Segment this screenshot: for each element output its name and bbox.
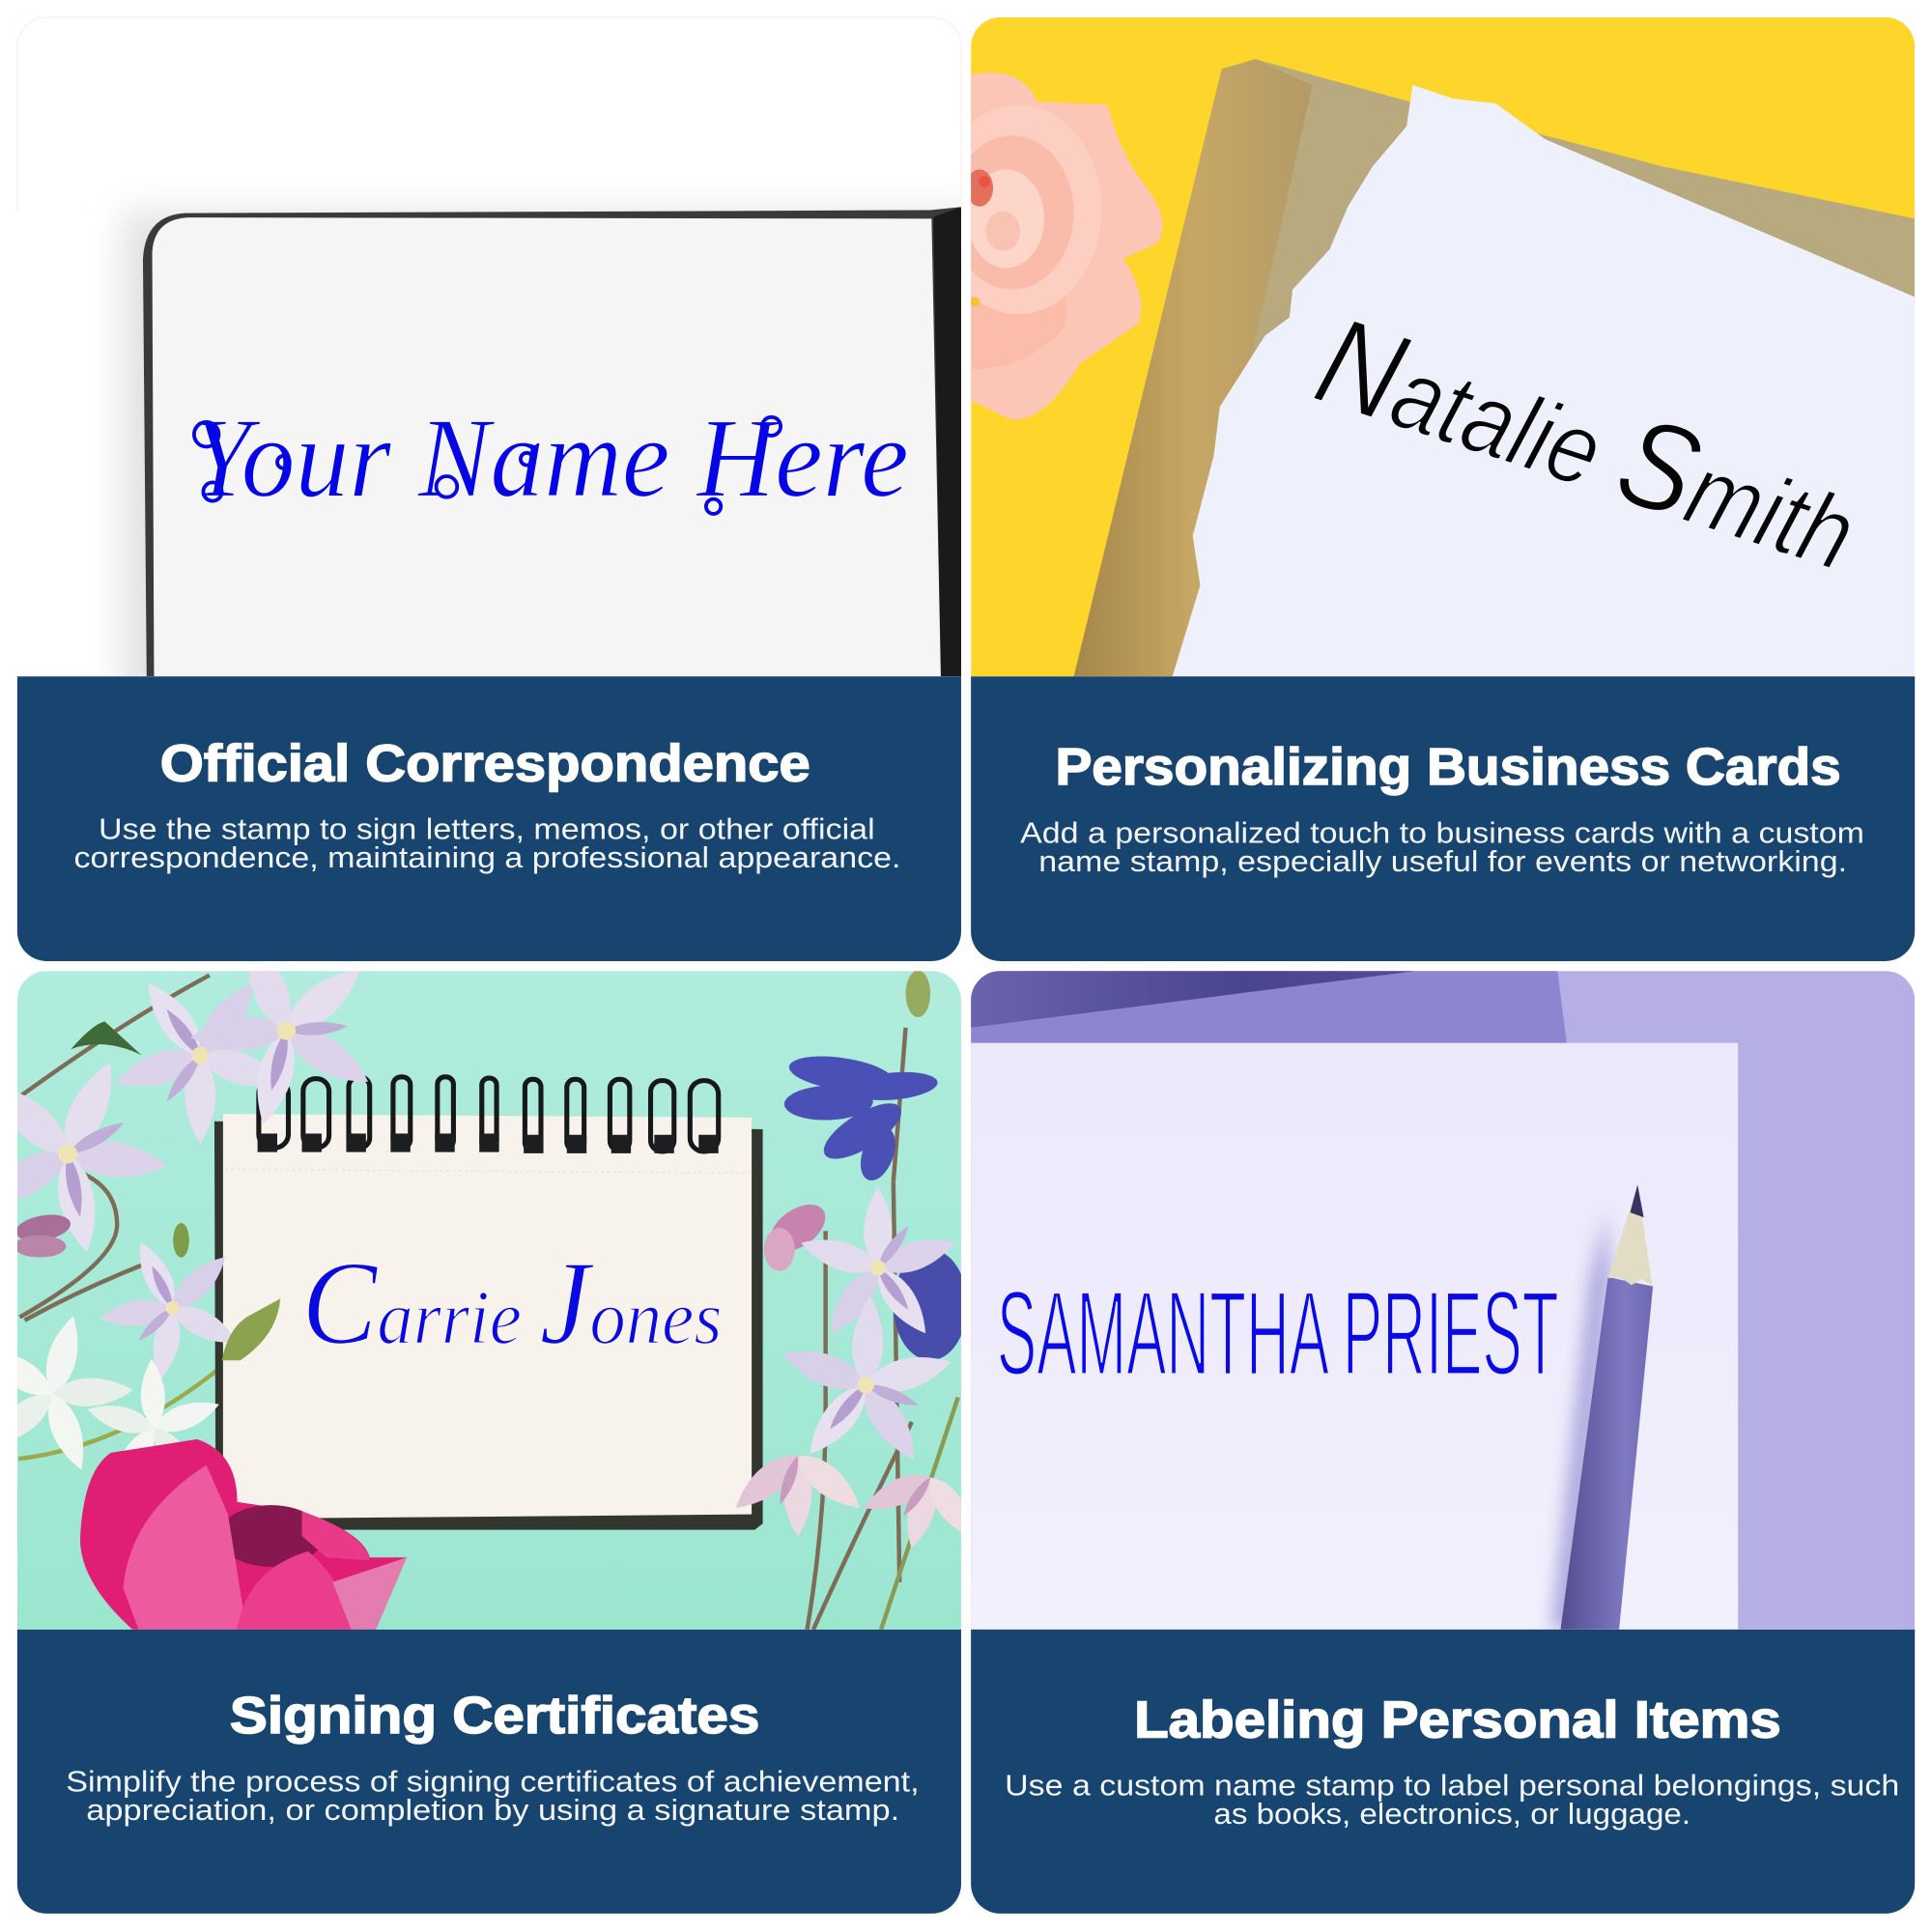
stems	[17, 976, 958, 1630]
caption band	[971, 1630, 1915, 1914]
icon: pink bud left	[17, 1215, 71, 1258]
notebook page	[223, 1114, 752, 1519]
pencil shadow	[1551, 1212, 1610, 1630]
description: name stamp, especially useful for events or networking.	[1038, 845, 1847, 878]
photo: torn paper on yellow	[935, 17, 1915, 676]
icon: white flowers left	[17, 1316, 219, 1470]
panel: signing certificates	[17, 971, 961, 1914]
page perforation	[225, 1169, 751, 1173]
spiral rings	[258, 1077, 719, 1153]
icon: dark blue flower	[894, 1254, 961, 1359]
icon: lilac flowers left	[0, 895, 422, 1393]
description: Use the stamp to sign letters, memos, or other official	[99, 813, 875, 846]
photo: black notebook with stamped name	[112, 201, 961, 676]
icon: blue flower	[783, 1051, 939, 1185]
heading: Labeling Personal Items	[1134, 1692, 1781, 1749]
panel: personalizing business cards	[935, 17, 1915, 961]
panel: official correspondence	[17, 17, 985, 961]
description: correspondence, maintaining a professional appearance.	[74, 841, 900, 874]
heading: Official Correspondence	[160, 736, 810, 793]
photo: paper and purple pencil	[971, 971, 1915, 1630]
panel: labeling personal items	[971, 971, 1915, 1914]
stamped name: Natalie Smith	[1301, 289, 1875, 597]
heading: Personalizing Business Cards	[1055, 739, 1841, 796]
torn paper	[1173, 85, 1915, 676]
stamped name: Your Name Here	[191, 394, 909, 521]
icon: pink bud right	[763, 1205, 825, 1271]
icon: rose	[971, 72, 1163, 419]
description: as books, electronics, or luggage.	[1213, 1798, 1690, 1831]
caption band	[971, 676, 1915, 961]
card outline	[17, 17, 961, 213]
description: Use a custom name stamp to label personal belongings, such	[1005, 1769, 1899, 1802]
description: Add a personalized touch to business cards with a custom	[1020, 817, 1864, 850]
stamped name: Carrie Jones	[302, 1236, 723, 1369]
icon: green bud top right	[906, 970, 930, 1017]
icon: green bud upper	[173, 1223, 189, 1258]
icon: lilac flowers right	[736, 1187, 961, 1548]
notebook back	[214, 1122, 763, 1530]
caption band	[17, 676, 961, 961]
leaf	[71, 1021, 142, 1055]
photo: spiral notebook among flowers	[17, 971, 961, 1630]
icon: pink peony	[80, 1439, 407, 1630]
description: Simplify the process of signing certificates of achievement,	[66, 1766, 920, 1799]
heading: Signing Certificates	[230, 1688, 759, 1745]
icon: green bud	[222, 1298, 280, 1360]
pencil	[1560, 1184, 1653, 1630]
book cover	[1074, 59, 1915, 676]
description: appreciation, or completion by using a signature stamp.	[86, 1794, 899, 1827]
caption band	[17, 1630, 961, 1914]
